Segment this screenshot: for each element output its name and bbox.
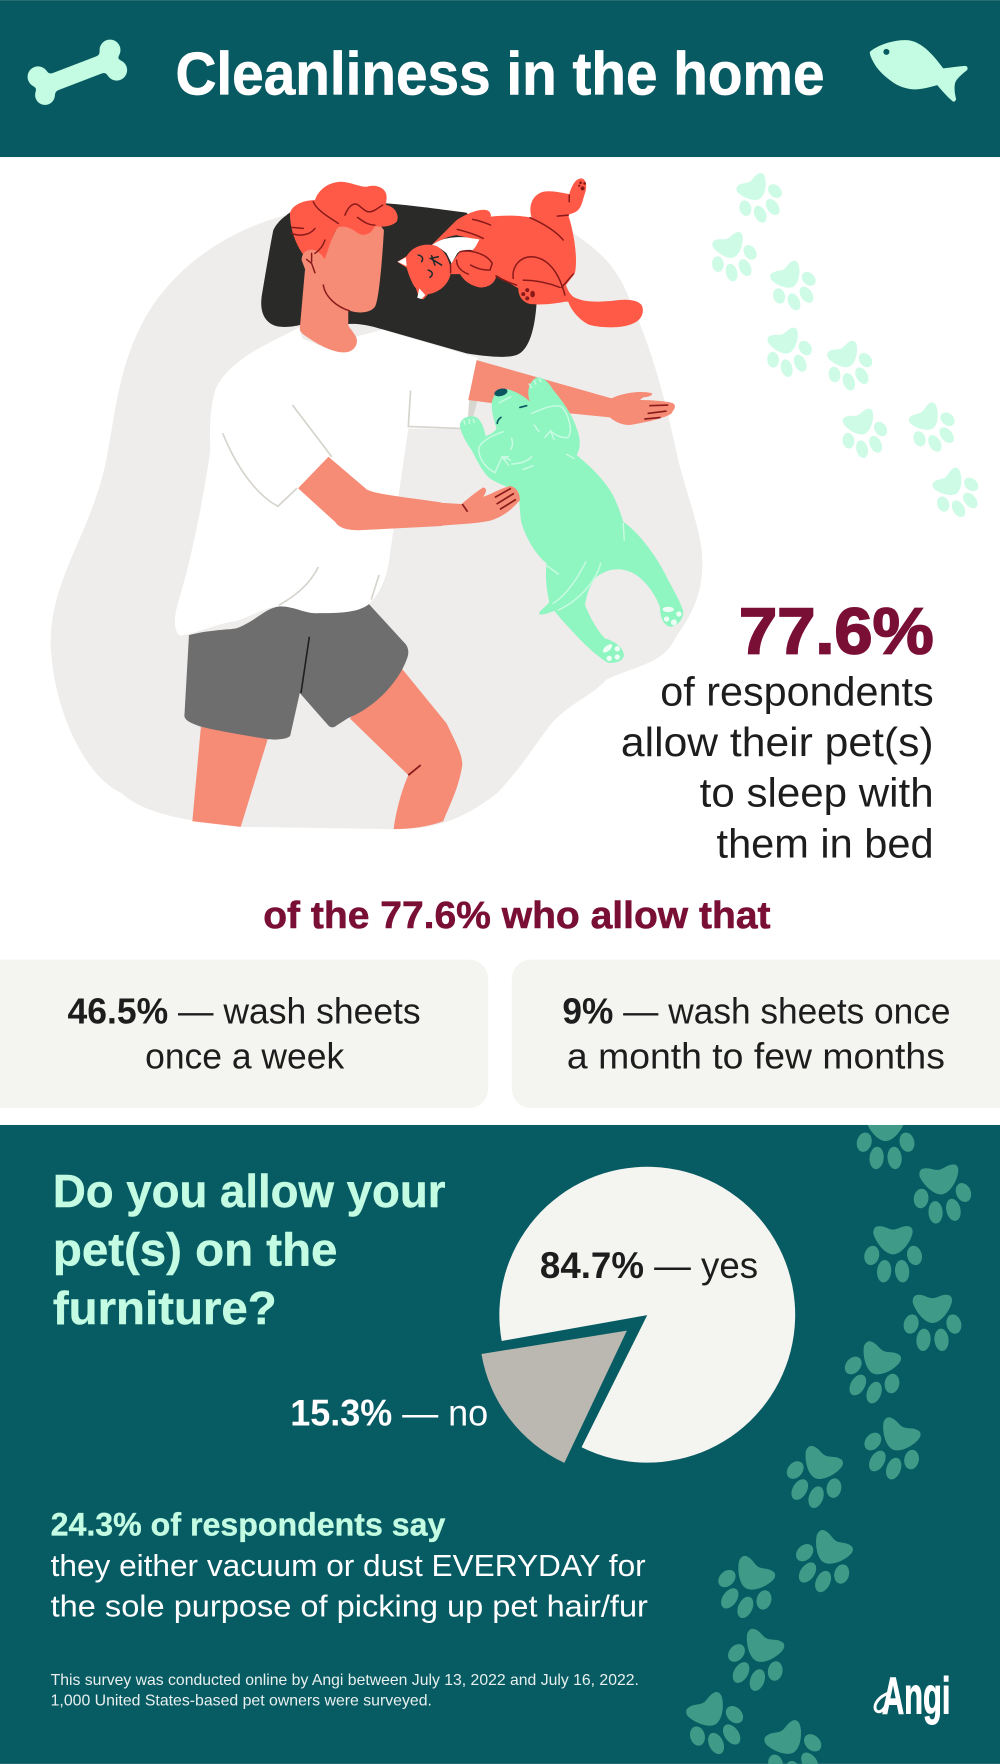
upper arm and hand <box>468 360 675 425</box>
background blob <box>51 215 702 829</box>
knee line <box>408 765 421 775</box>
icon: bone <box>27 39 127 105</box>
logo: Angi <box>875 1666 951 1724</box>
dog <box>460 377 683 663</box>
subheading: of the 77.6% who allow that <box>263 894 771 937</box>
shirt <box>175 327 478 636</box>
statistic: 77.6% sleep with pets <box>621 595 934 866</box>
panel: wash monthly: a month to few months <box>567 1036 945 1077</box>
vacuum statistic: the sole purpose of picking up pet hair/fur <box>51 1589 648 1624</box>
lower arm <box>298 457 442 530</box>
vacuum statistic: they either vacuum or dust EVERYDAY for <box>51 1548 646 1583</box>
panel: furniture survey <box>0 1113 1000 1764</box>
panel: wash weekly <box>0 960 488 1108</box>
paw prints: bottom trail <box>675 1113 977 1764</box>
panel: wash weekly: 46.5% — wash sheets <box>67 991 421 1032</box>
statistic: 77.6% sleep with pets: 77.6% <box>739 595 934 668</box>
left leg <box>192 727 268 827</box>
face, neck and hair <box>290 182 398 352</box>
paw prints: top trail <box>703 167 990 527</box>
pillow <box>261 203 537 357</box>
question heading: Do you allow your <box>53 1165 445 1217</box>
vacuum statistic <box>51 1506 648 1624</box>
question heading: furniture? <box>53 1282 277 1334</box>
lower hand <box>440 486 520 526</box>
title: Cleanliness in the home <box>175 40 825 108</box>
panel: wash monthly <box>512 960 1000 1108</box>
statistic caption: them in bed <box>717 820 934 866</box>
question heading <box>53 1165 445 1334</box>
statistic caption: to sleep with <box>700 770 934 816</box>
illustration: person with pets in bed <box>51 178 702 829</box>
panel: wash weekly: once a week <box>145 1036 345 1077</box>
statistic caption: of respondents <box>660 668 934 714</box>
survey footnote <box>51 1671 639 1709</box>
question heading: pet(s) on the <box>53 1224 337 1276</box>
pie slice: yes <box>499 1167 795 1463</box>
label: no: 15.3% — no <box>290 1391 488 1433</box>
survey footnote: 1,000 United States-based pet owners were surveyed. <box>51 1691 432 1709</box>
right leg <box>350 668 462 829</box>
icon: fish <box>870 40 968 102</box>
panel: wash monthly: 9% — wash sheets once <box>562 991 951 1032</box>
statistic caption: allow their pet(s) <box>621 719 934 765</box>
vacuum statistic: 24.3% of respondents say <box>51 1506 445 1543</box>
pie slice: no <box>481 1331 627 1463</box>
sleeve edge <box>468 398 477 426</box>
survey footnote: This survey was conducted online by Angi between July 13, 2022 and July 16, 2022. <box>51 1671 639 1689</box>
cat <box>397 178 643 327</box>
statistic caption <box>621 668 934 866</box>
panel: header <box>0 0 1000 157</box>
logo: Angi: Angi <box>882 1666 951 1724</box>
label: yes: 84.7% — yes <box>540 1244 758 1286</box>
shorts <box>184 604 408 740</box>
pie chart <box>290 1167 795 1463</box>
